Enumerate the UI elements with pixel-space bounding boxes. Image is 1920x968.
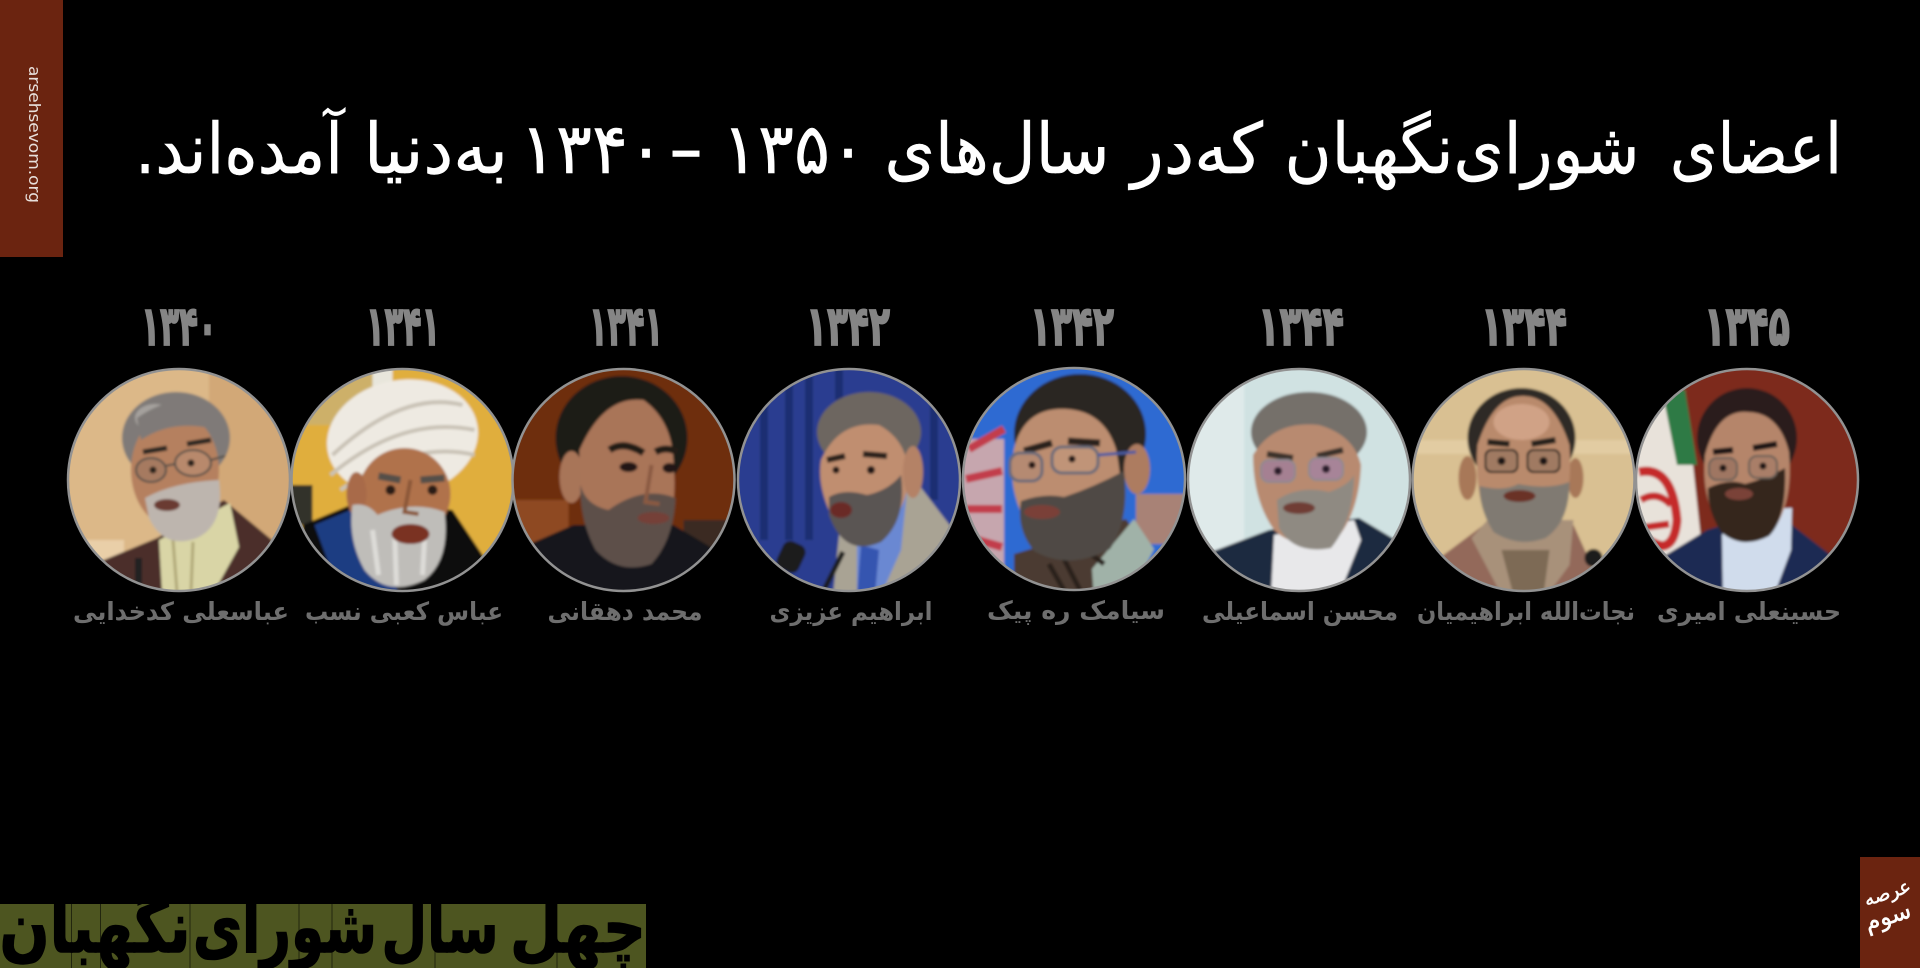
bottom banner: forty years of the Guardian Council: چهل [510, 885, 646, 968]
side tab: website: arsehsevom.org [25, 66, 44, 203]
year 1344: ۱۳۴۴ [1481, 294, 1567, 358]
name: محسن اسماعیلی [1202, 597, 1398, 627]
member 6 [1184, 294, 1414, 627]
title: شورای‌نگهبان [1284, 108, 1640, 190]
bottom banner: forty years of the Guardian Council: شورای [193, 885, 377, 968]
portrait: Kaabi Nasab [288, 365, 518, 600]
member 2 [288, 294, 518, 626]
portrait: Dehghani [508, 365, 738, 600]
bottom banner: forty years of the Guardian Council: نگهبان [0, 885, 190, 968]
title: ۱۳۴۰ [520, 108, 664, 190]
side tab: website [0, 0, 63, 257]
year 1345: ۱۳۴۵ [1704, 294, 1790, 358]
title: به‌دنیا [364, 108, 508, 190]
title: سال‌های [884, 108, 1110, 190]
title: که‌در [1128, 108, 1264, 190]
bottom banner: forty years of the Guardian Council: سال [382, 885, 498, 968]
member 3 [508, 294, 738, 626]
portrait: Amiri [1632, 365, 1862, 600]
portrait: Kadkhodaei [64, 365, 299, 600]
name: حسینعلی امیری [1657, 597, 1841, 627]
title [135, 107, 1842, 190]
member 8 [1632, 294, 1862, 627]
title: ۱۳۵۰ [722, 108, 866, 190]
year 1341: ۱۳۴۱ [589, 294, 663, 358]
portrait: Esmaeili [1184, 365, 1414, 600]
logo: Arseh Sevom [1855, 857, 1920, 968]
bottom banner: forty years of the Guardian Council [0, 904, 646, 968]
logo: Arseh Sevom: عرصه [1861, 875, 1914, 911]
member 1 [64, 294, 299, 626]
year 1340: ۱۳۴۰ [141, 294, 217, 358]
portrait: Ebrahimian [1408, 365, 1638, 600]
title: - [668, 108, 704, 190]
name: عباس کعبی نسب [305, 597, 503, 626]
year 1342: ۱۳۴۲ [806, 294, 890, 358]
year 1344: ۱۳۴۴ [1258, 294, 1344, 358]
name: سیامک ره پیک [987, 596, 1165, 625]
name: نجات‌الله ابراهیمیان [1417, 597, 1635, 627]
title: اعضای [1670, 108, 1842, 190]
name: محمد دهقانی [548, 597, 702, 626]
logo: Arseh Sevom: سوم [1861, 896, 1914, 937]
portrait: Rahpeyk [959, 364, 1189, 599]
year 1341: ۱۳۴۱ [366, 294, 440, 358]
name: عباسعلی کدخدایی [73, 597, 289, 626]
title: آمده‌اند. [135, 107, 346, 190]
member 7 [1408, 294, 1638, 627]
name: ابراهیم عزیزی [770, 597, 932, 627]
year 1342: ۱۳۴۲ [1030, 294, 1114, 358]
member 4 [734, 294, 964, 627]
portrait: Azizi [734, 365, 964, 595]
member 5 [959, 294, 1189, 625]
